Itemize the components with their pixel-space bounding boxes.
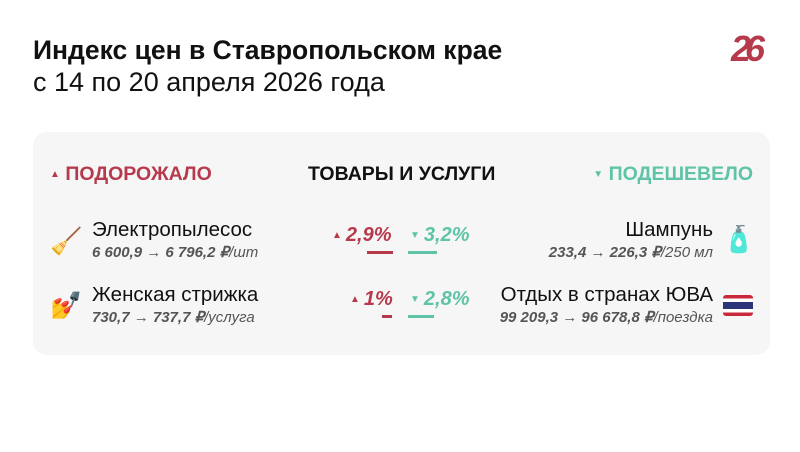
row 1 right: 233,4 → 226,3 ₽/250 мл xyxy=(549,244,713,261)
icon: thai flag xyxy=(723,295,753,316)
row 2 percents: ▲1% xyxy=(350,288,393,310)
row 1 right xyxy=(548,218,755,261)
row 1 left: 6 600,9 → 6 796,2 ₽/шт xyxy=(92,244,258,261)
row 2 left: 730,7 → 737,7 ₽/услуга xyxy=(92,309,255,326)
subtitle: с 14 по 20 апреля 2026 года xyxy=(33,67,385,97)
header: podeshevelo: ▼ ПОДЕШЕВЕЛО xyxy=(593,163,753,185)
icon: nails: 💅 xyxy=(50,290,82,320)
header: podorozhalo: ▲ ПОДОРОЖАЛО xyxy=(50,163,212,185)
row 2 right: 99 209,3 → 96 678,8 ₽/поездка xyxy=(500,309,713,326)
icon: vacuum: 🧹 xyxy=(50,226,82,256)
row 2 percents: ▼2,8% xyxy=(410,288,470,310)
row 1 percents: ▼3,2% xyxy=(410,224,470,246)
row 2 left: Женская стрижка xyxy=(92,283,258,306)
row 1 right: Шампунь xyxy=(625,218,713,241)
row 2 right: Отдых в странах ЮВА xyxy=(501,283,713,306)
row 1 percents: ▲2,9% xyxy=(332,224,392,246)
row 1 percents xyxy=(332,224,470,254)
header: goods: ТОВАРЫ И УСЛУГИ xyxy=(308,163,495,185)
row 1 left xyxy=(50,218,258,261)
row 2 right xyxy=(500,283,753,326)
logo 26: 26 xyxy=(731,28,759,69)
row 1 left: Электропылесос xyxy=(92,218,252,241)
panel xyxy=(33,132,770,355)
row 2 left xyxy=(50,283,258,326)
row 2 percents xyxy=(350,288,470,318)
title: Индекс цен в Ставропольском крае xyxy=(33,35,502,65)
icon: shampoo: 🧴 xyxy=(723,224,755,254)
